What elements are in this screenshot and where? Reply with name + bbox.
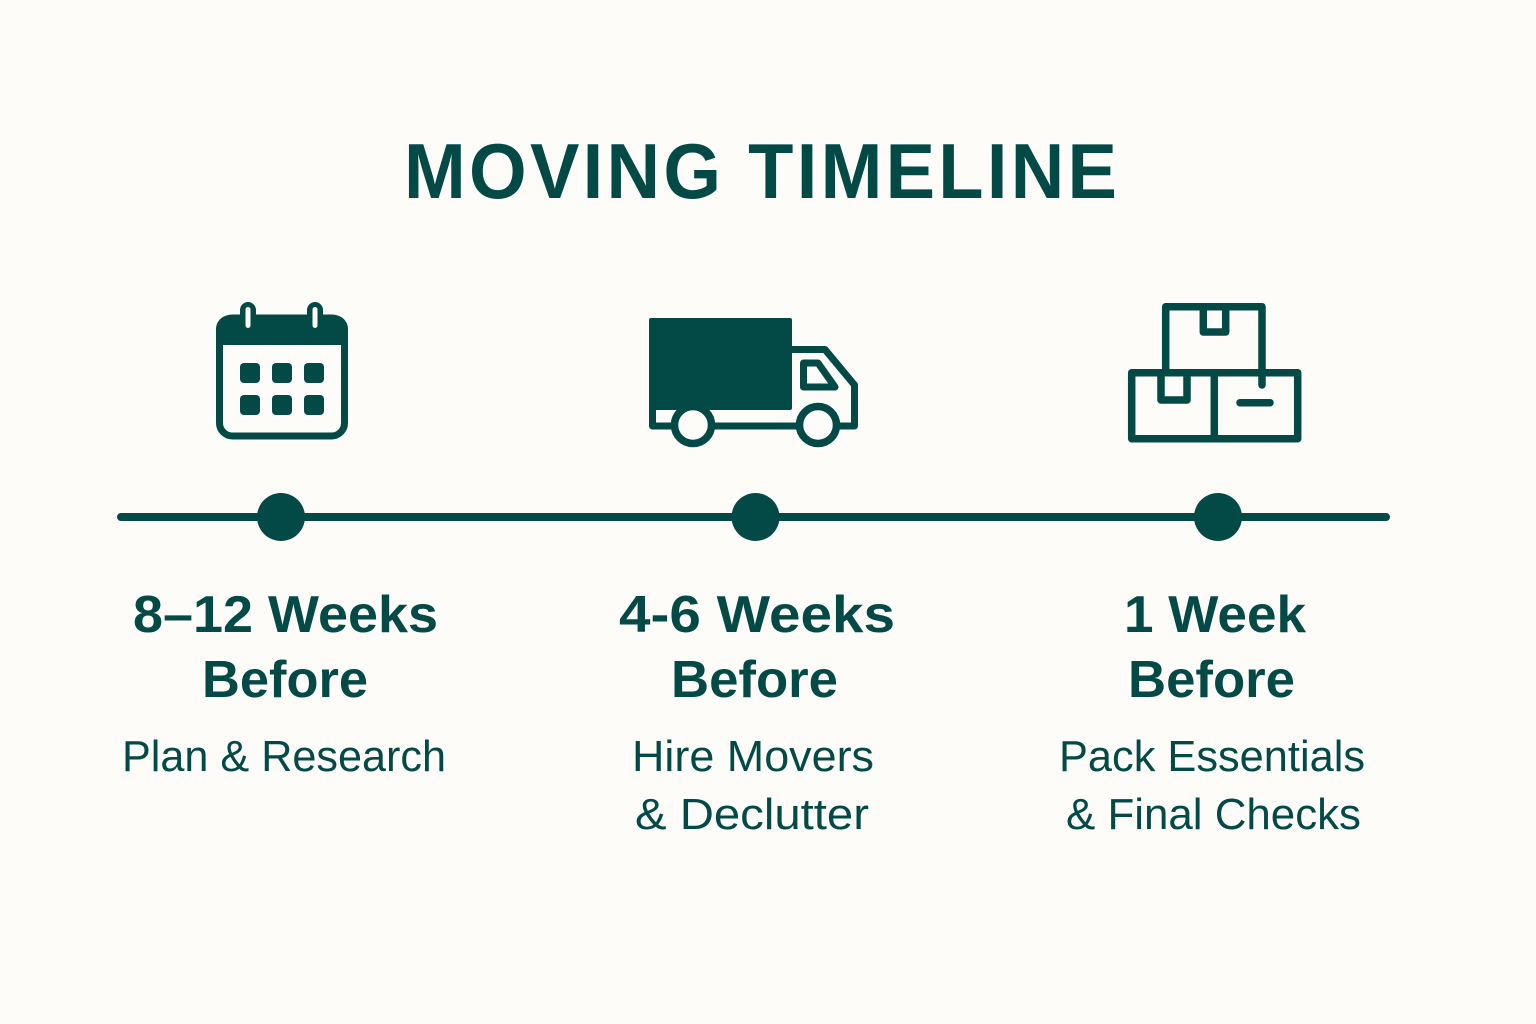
step 3 text: & Final Checks — [1066, 790, 1361, 839]
step 1 text — [122, 586, 446, 781]
step 1 text: Before — [202, 651, 368, 709]
icon: calendar — [216, 302, 348, 436]
step 3 text: 1 Week — [1124, 586, 1306, 644]
step 2 text: Before — [671, 651, 838, 709]
icon: stacked boxes — [1132, 307, 1298, 439]
step 2 text: & Declutter — [635, 790, 869, 839]
title: MOVING TIMELINE — [404, 128, 1117, 215]
step 1 text: Plan & Research — [122, 732, 446, 781]
step 1 text: 8–12 Weeks — [133, 586, 438, 644]
timeline with milestones — [121, 493, 1386, 541]
step 2 text: 4-6 Weeks — [619, 586, 895, 644]
icon: moving truck — [649, 318, 854, 444]
step 2 text: Hire Movers — [632, 732, 874, 781]
step 2 text — [619, 586, 895, 839]
step 3 text — [1059, 586, 1365, 839]
step 3 text: Before — [1128, 651, 1295, 709]
step 3 text: Pack Essentials — [1059, 732, 1365, 781]
